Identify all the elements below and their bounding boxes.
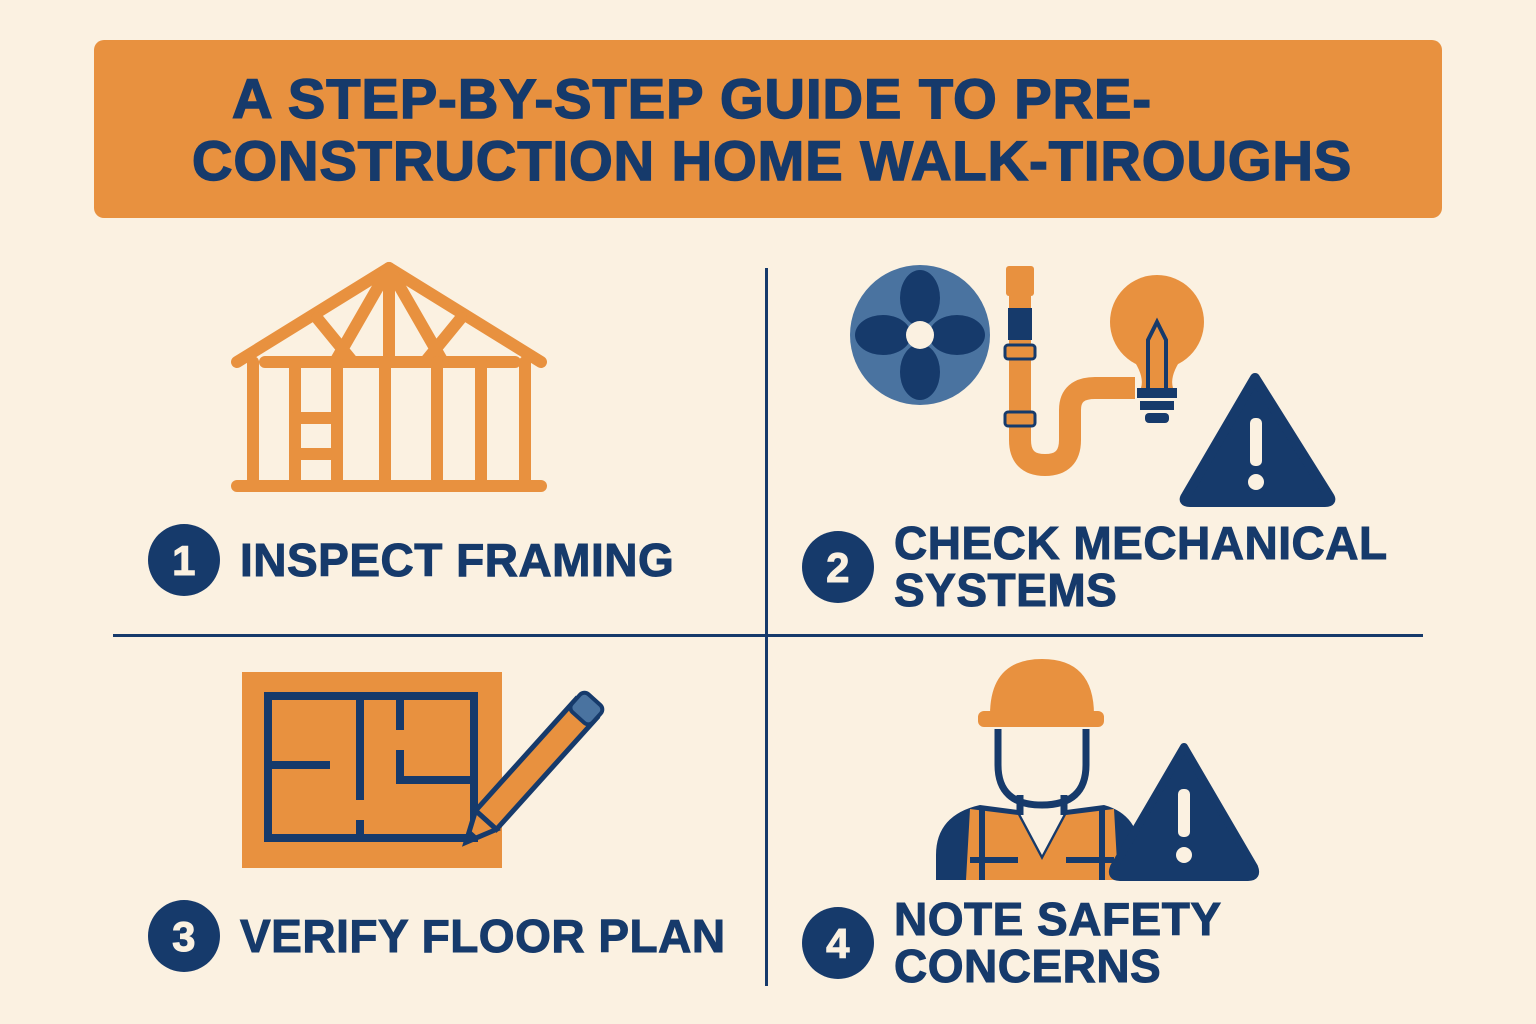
icon: floor plan and pencil: [242, 672, 604, 868]
title: A STEP-BY-STEP GUIDE TO PRE-: [232, 67, 1152, 130]
icon: house frame: [231, 262, 547, 492]
step 2 label: CHECK MECHANICAL: [894, 517, 1388, 569]
icon: mechanical systems: [850, 265, 1336, 507]
pipe: [1020, 270, 1135, 465]
step 4 label: NOTE SAFETY: [894, 893, 1222, 945]
horizontal divider: [113, 634, 1423, 637]
hard hat: [990, 659, 1094, 715]
step 2 label: [802, 517, 1388, 616]
bulb: [1110, 275, 1204, 423]
title banner: [94, 40, 1442, 218]
vertical divider: [765, 268, 768, 986]
body: [936, 805, 1140, 880]
step 1 label: INSPECT FRAMING: [240, 534, 674, 586]
warning: [1185, 378, 1330, 502]
step 1 label: [148, 524, 674, 596]
fan: [850, 265, 990, 405]
step 1 label: 1: [172, 536, 196, 584]
step 4 label: 4: [826, 920, 850, 966]
step 4 label: CONCERNS: [894, 940, 1161, 992]
step 2 label: SYSTEMS: [894, 564, 1117, 616]
step 2 label: 2: [826, 544, 850, 590]
step 4 label: [802, 893, 1222, 992]
head: [998, 729, 1086, 805]
title: [192, 67, 1352, 192]
step 3 label: 3: [172, 912, 196, 960]
icon: worker and warning: [936, 659, 1260, 881]
warning: [1113, 747, 1255, 877]
step 3 label: [148, 900, 726, 972]
step 3 label: VERIFY FLOOR PLAN: [240, 910, 726, 962]
title: CONSTRUCTION HOME WALK-TIROUGHS: [192, 129, 1352, 192]
